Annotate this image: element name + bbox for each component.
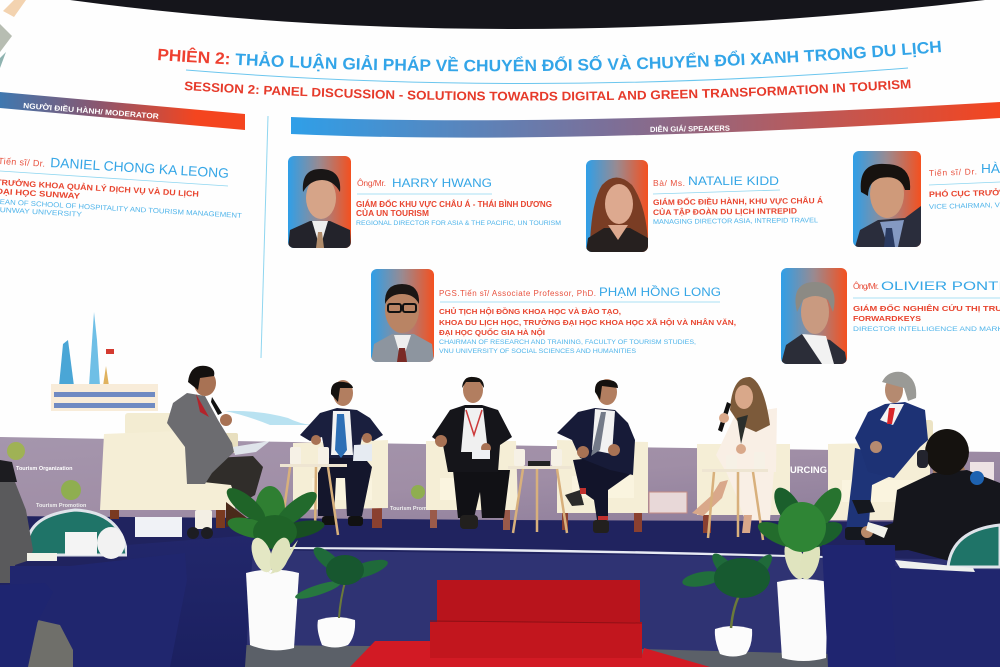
speaker card: Olivier Ponti — [781, 268, 1000, 364]
portrait: Natalie Kidd — [586, 160, 648, 252]
speaker card: Natalie Kidd: MANAGING DIRECTOR ASIA, INTREPID TRAVEL — [653, 217, 818, 226]
chair: panelist 2 — [293, 440, 388, 528]
speaker card: Pham Hong Long: CHAIRMAN OF RESEARCH AND TRAINING, FACULTY OF TOURISM STUDIES, — [439, 339, 696, 346]
session subtitle: SESSION 2: PANEL DISCUSSION - SOLUTIONS TOWARDS DIGITAL AND GREEN TRANSFORMATION IN TOURISM — [184, 80, 910, 101]
portrait: Dr. Ha — [853, 151, 921, 247]
person: panelist 3 — [432, 377, 512, 529]
chair: panelist 3 — [426, 441, 518, 530]
speaker card: Harry Hwang: REGIONAL DIRECTOR FOR ASIA & THE PACIFIC, UN TOURISM — [356, 220, 561, 227]
plant: left large — [222, 483, 326, 650]
city skyline illustration — [51, 312, 312, 425]
portrait: Olivier Ponti — [781, 268, 847, 364]
moderator details: DEAN OF SCHOOL OF HOSPITALITY AND TOURISM MANAGEMENT — [0, 199, 243, 220]
right table group — [822, 525, 1000, 667]
portrait: Pham Hong Long — [371, 269, 434, 362]
speaker card: Olivier Ponti: OLIVIER PONTI — [881, 279, 1000, 293]
speaker card: Natalie Kidd: Bà/ Ms. — [653, 178, 685, 188]
chair: panelist 6 — [828, 420, 933, 520]
backdrop banner: URCING — [790, 465, 827, 476]
person: audience left — [0, 480, 33, 583]
chair back: right — [948, 525, 1000, 567]
paper on table — [895, 560, 975, 572]
speaker card: Pham Hong Long — [371, 269, 736, 362]
moderator details: TRƯỞNG KHOA QUẢN LÝ DỊCH VỤ VÀ DU LỊCH — [0, 178, 199, 199]
plant: right small — [681, 550, 777, 656]
table A — [127, 535, 254, 667]
side table 3 — [702, 452, 768, 540]
speaker card: Natalie Kidd: NATALIE KIDD — [688, 174, 779, 188]
chair: panelist 5 — [697, 444, 790, 533]
person: panelist 6 — [845, 372, 928, 540]
speaker card: Olivier Ponti: FORWARDKEYS — [853, 314, 921, 323]
speaker card: Olivier Ponti: GIÁM ĐỐC NGHIÊN CỨU THỊ TRƯ — [853, 303, 1000, 313]
speakers ribbon — [291, 102, 1000, 138]
speaker card: Harry Hwang: CỦA UN TOURISM — [356, 209, 429, 218]
speaker card: Harry Hwang: GIÁM ĐỐC KHU VỰC CHÂU Á - THÁI BÌNH DƯƠNG — [356, 199, 552, 209]
table D — [890, 566, 1000, 667]
speaker card: Pham Hong Long: PHẠM HỒNG LONG — [599, 284, 721, 299]
corner logo swirl — [0, 0, 26, 68]
speaker card: Pham Hong Long: VNU UNIVERSITY OF SOCIAL SCIENCES AND HUMANITIES — [439, 348, 637, 355]
speaker card: Dr. Ha: Tiến sĩ/ Dr. — [929, 166, 977, 178]
chair: moderator — [100, 413, 238, 528]
person: audience right — [861, 429, 1000, 667]
side table 2 — [508, 449, 572, 533]
person: audience lower — [28, 620, 73, 667]
moderator details — [0, 155, 243, 220]
moderator ribbon — [0, 92, 245, 130]
backdrop banner: Tourism Organization — [16, 466, 73, 472]
vertical divider — [261, 116, 268, 358]
speaker card: Natalie Kidd: CỦA TẬP ĐOÀN DU LỊCH INTREPID — [653, 206, 797, 217]
stage top and face — [0, 500, 1000, 667]
plant: right large — [754, 482, 848, 661]
backdrop banner: Tourism Promotion — [36, 503, 87, 509]
speaker card: Pham Hong Long: KHOA DU LỊCH HỌC, TRƯỜNG ĐẠI HỌC KHOA HỌC XÃ HỘI VÀ NHÂN VĂN, — [439, 318, 736, 327]
speaker card: Pham Hong Long: CHỦ TỊCH HỘI ĐỒNG KHOA HỌC VÀ ĐÀO TẠO, — [439, 306, 621, 316]
table B — [10, 553, 187, 667]
backdrop banner: Tourism Promotion — [390, 506, 441, 512]
backdrop banner — [0, 437, 1000, 522]
table C — [0, 583, 53, 667]
speaker card: Harry Hwang: HARRY HWANG — [392, 176, 492, 190]
portrait: Harry Hwang — [288, 156, 351, 248]
left table group — [0, 460, 254, 667]
speaker card: Harry Hwang: Ông/Mr. — [357, 178, 386, 188]
speaker card: Dr. Ha: VICE CHAIRMAN, V — [929, 202, 1000, 211]
plant: left small — [294, 543, 390, 648]
speaker card: Pham Hong Long: PGS.Tiến sĩ/ Associate Professor, PhD. — [439, 289, 596, 298]
side table 1 — [280, 447, 347, 535]
person: moderator — [167, 366, 270, 527]
speaker card: Pham Hong Long: ĐẠI HỌC QUỐC GIA HÀ NỘI — [439, 327, 545, 337]
items on table — [135, 510, 213, 539]
speaker card: Dr. Ha: HÀ — [981, 161, 1000, 176]
person: panelist 2 — [300, 380, 383, 526]
moderator ribbon: NGƯỜI ĐIỀU HÀNH/ MODERATOR — [23, 100, 160, 121]
speaker card: Dr. Ha: PHÓ CỤC TRƯỞ — [929, 188, 1000, 199]
speaker card: Olivier Ponti: DIRECTOR INTELLIGENCE AND MARK — [853, 326, 1000, 333]
speaker card: Natalie Kidd — [586, 160, 823, 252]
chair back: left — [28, 510, 127, 559]
red carpet steps — [350, 580, 710, 667]
speakers ribbon: DIỄN GIÁ/ SPEAKERS — [650, 124, 730, 134]
speaker card: Dr. Ha — [853, 151, 1000, 247]
person: panelist 5 — [692, 377, 777, 533]
chair: panelist 4 — [557, 440, 648, 532]
speaker card: Harry Hwang — [288, 156, 561, 248]
session title: PHIÊN 2: THẢO LUẬN GIẢI PHÁP VỀ CHUYỂN ĐỔI SỐ VÀ CHUYỂN ĐỔI XANH TRONG DU LỊCH — [158, 40, 941, 72]
speaker card: Olivier Ponti: Ông/Mr. — [853, 281, 879, 291]
person: panelist 4 — [557, 379, 635, 533]
moderator details: DANIEL CHONG KA LEONG — [50, 155, 229, 181]
speaker card: Natalie Kidd: GIÁM ĐỐC ĐIỀU HÀNH, KHU VỰC CHÂU Á — [653, 195, 823, 207]
